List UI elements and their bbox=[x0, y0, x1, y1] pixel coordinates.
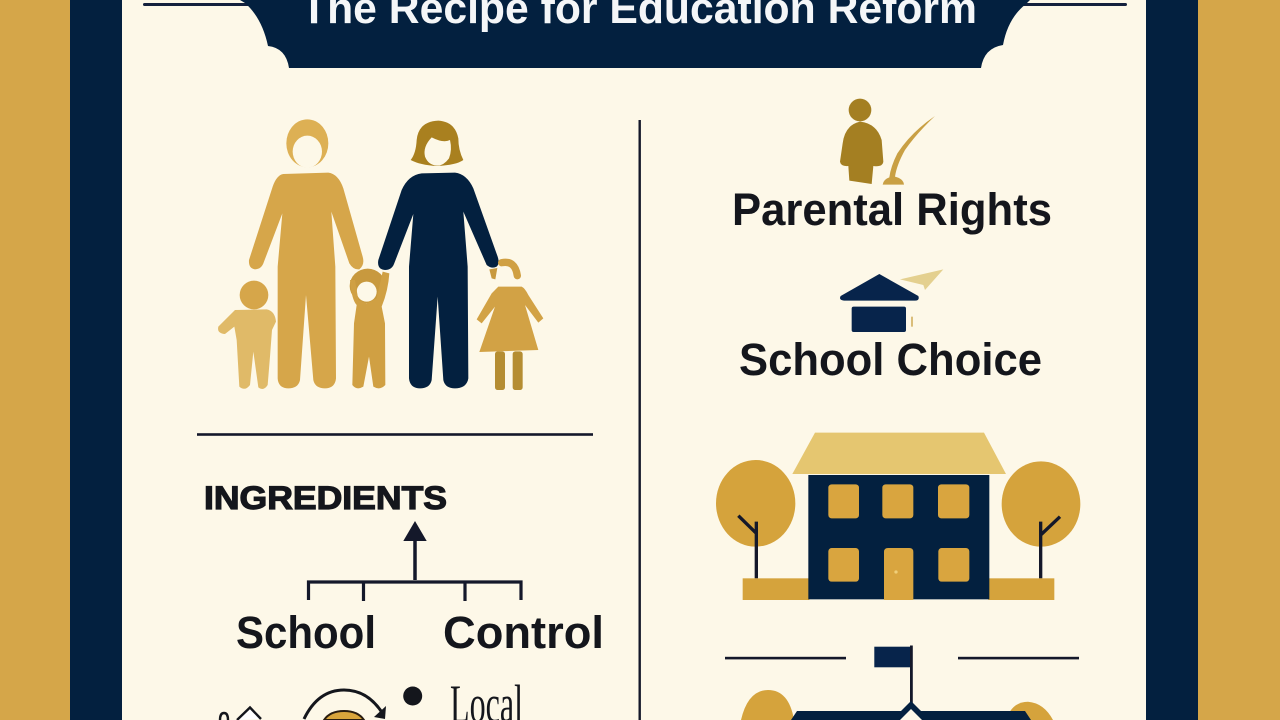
centre divider bbox=[638, 120, 641, 720]
icon: parent and quill bbox=[840, 99, 935, 185]
roof bbox=[792, 433, 1006, 474]
icon: landscape sketch bbox=[220, 708, 261, 720]
title banner bbox=[143, 0, 1127, 68]
icon: family bbox=[218, 119, 543, 390]
bullet bbox=[403, 686, 422, 706]
icon: school building bbox=[716, 433, 1080, 600]
child left bbox=[218, 281, 276, 389]
label: control: Control bbox=[443, 607, 604, 658]
divider line left bbox=[725, 657, 846, 659]
quill bbox=[883, 116, 935, 185]
label: school choice: School Choice bbox=[739, 334, 1042, 385]
tree right bbox=[1002, 461, 1080, 578]
tree left bbox=[716, 460, 795, 578]
windows and door bbox=[828, 484, 969, 600]
label: school: School bbox=[236, 607, 376, 658]
building bbox=[808, 475, 989, 599]
icon: school choice cap bbox=[840, 269, 943, 332]
icon: circular arrow with food bbox=[304, 690, 386, 720]
divider line right bbox=[958, 657, 1079, 659]
child middle bbox=[350, 269, 389, 388]
icon: bushes bbox=[741, 690, 1053, 720]
icon: schoolhouse with flag bbox=[791, 646, 1031, 720]
ingredients heading: INGREDIENTS bbox=[204, 480, 447, 516]
father bbox=[249, 119, 363, 388]
door knob bbox=[894, 570, 898, 574]
ground bbox=[743, 578, 1054, 600]
ingredients tree diagram with arrow bbox=[308, 521, 521, 601]
child right bbox=[477, 262, 543, 390]
horizontal rule bbox=[197, 433, 593, 436]
label: parental rights: Parental Rights bbox=[732, 184, 1052, 235]
person bbox=[840, 99, 883, 184]
mother bbox=[378, 121, 499, 388]
